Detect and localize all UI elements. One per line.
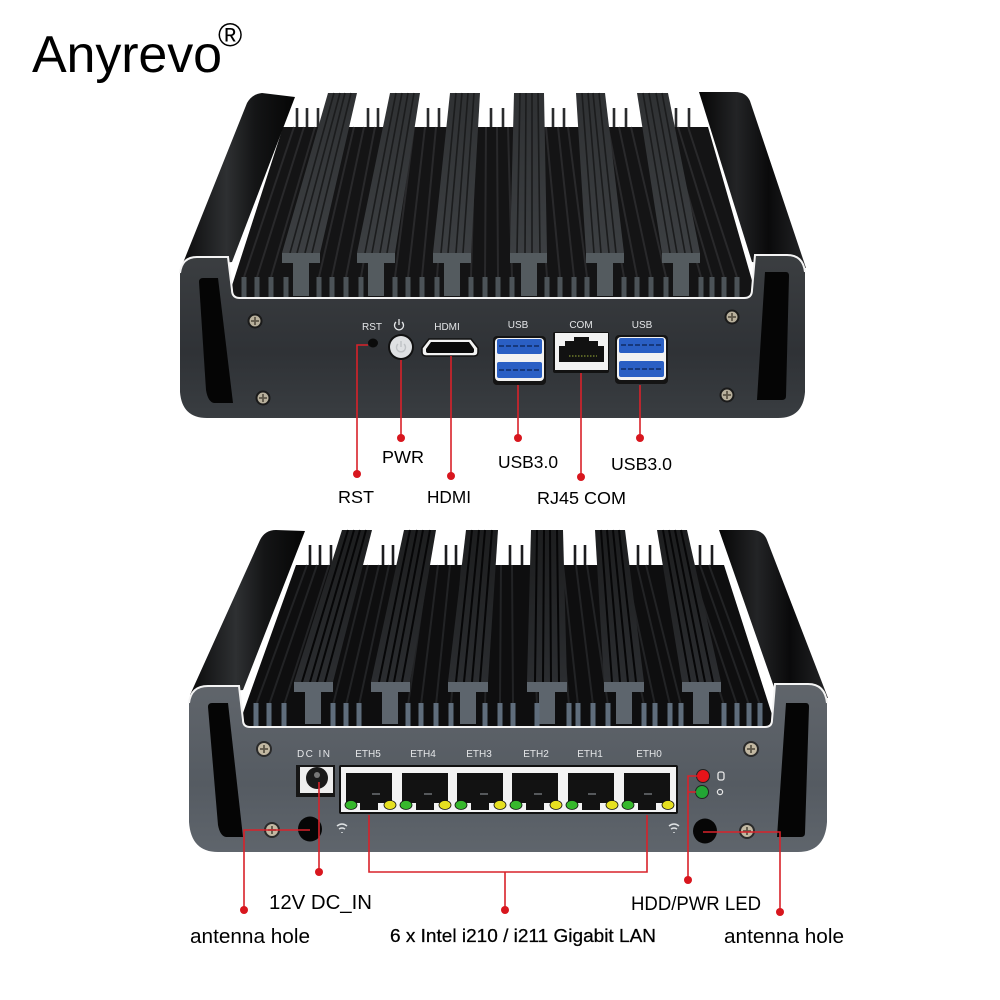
bottom device callout labels: 12V DC_IN — [269, 892, 372, 914]
port labels: USB — [508, 320, 529, 331]
port ETH2 — [510, 773, 562, 810]
front panel — [189, 684, 827, 852]
left rail — [190, 530, 305, 695]
port labels: ETH1 — [577, 749, 603, 760]
raised fins — [282, 93, 700, 253]
top device callout labels: HDMI — [427, 487, 471, 507]
port ETH3 — [455, 773, 506, 810]
bottom device callout labels: antenna hole — [724, 926, 844, 948]
RJ45 COM port — [553, 332, 609, 373]
top device callout labels: RJ45 COM — [537, 488, 626, 508]
bottom device callout labels: 6 x Intel i210 / i211 Gigabit LAN — [390, 926, 656, 946]
port labels: DC IN — [297, 749, 330, 760]
bottom device callout labels: HDD/PWR LED — [631, 894, 761, 915]
port labels — [297, 749, 662, 760]
reset hole — [368, 338, 378, 348]
front panel — [180, 255, 805, 418]
left vent — [208, 703, 243, 837]
icon: wifi left — [337, 824, 347, 833]
port labels: ETH4 — [410, 749, 436, 760]
right rail — [719, 530, 828, 698]
LAN port block — [339, 765, 678, 814]
HDMI port — [422, 339, 478, 356]
panel white edge — [180, 255, 805, 298]
bottom device callout labels: antenna hole — [190, 926, 310, 948]
panel white edge — [189, 684, 827, 727]
top device callout labels: USB3.0 — [611, 454, 672, 474]
heatsink recess — [228, 108, 757, 298]
port labels: RST — [362, 322, 382, 333]
right vent — [757, 272, 789, 400]
top device: mini PC rear view — [180, 92, 806, 418]
fin end T sections — [282, 253, 700, 296]
fin end T sections — [294, 682, 721, 724]
port labels: USB — [632, 320, 653, 331]
port labels: ETH2 — [523, 749, 549, 760]
port labels: ETH0 — [636, 749, 662, 760]
top device callout lines and dots — [353, 345, 644, 481]
top device callout labels: USB3.0 — [498, 452, 558, 472]
power button — [388, 334, 414, 360]
left rail — [181, 93, 295, 268]
port labels: COM — [569, 320, 593, 331]
port labels: ETH5 — [355, 749, 381, 760]
port labels — [362, 320, 653, 333]
top device callout labels — [338, 447, 672, 508]
icon: wifi right — [669, 824, 679, 833]
screws — [257, 742, 758, 838]
USB port left — [493, 336, 546, 385]
USB port right — [615, 335, 668, 384]
bottom device: mini PC front view — [189, 530, 828, 852]
right vent — [777, 703, 809, 837]
port ETH1 — [566, 773, 618, 810]
DC jack — [296, 765, 335, 797]
title: Anyrevo brand: Anyrevo — [32, 26, 222, 84]
fin end bars — [244, 277, 737, 297]
top device callout labels: PWR — [382, 447, 424, 467]
left vent — [199, 278, 233, 403]
bottom device callout lines and dots — [240, 776, 784, 916]
antenna holes — [298, 816, 717, 844]
screws — [248, 310, 738, 404]
icon: power symbol — [395, 319, 404, 330]
bottom device callout labels — [190, 892, 844, 948]
port ETH4 — [400, 773, 451, 810]
raised fins — [294, 530, 721, 682]
port ETH0 — [622, 773, 674, 810]
port labels: HDMI — [434, 322, 460, 333]
fin end bars — [256, 703, 760, 726]
status LEDs — [696, 770, 724, 798]
heatsink recess — [238, 545, 776, 727]
port labels: ETH3 — [466, 749, 492, 760]
top device callout labels: RST — [338, 487, 374, 507]
port ETH5 — [345, 773, 396, 810]
right rail — [699, 92, 806, 268]
title: Anyrevo brand: ® — [218, 16, 242, 53]
